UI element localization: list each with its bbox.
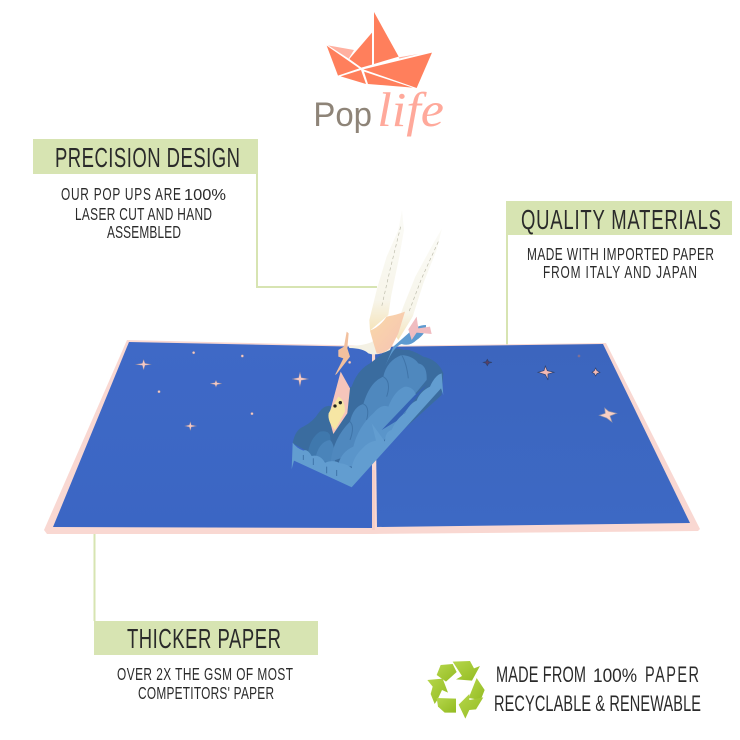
recycling statement: MADE FROM bbox=[496, 662, 586, 687]
callout: precision design: LASER CUT AND HAND bbox=[75, 205, 212, 225]
ribbon bow bbox=[335, 332, 350, 375]
small front-left arches bbox=[307, 431, 333, 465]
callout: precision design: ASSEMBLED bbox=[107, 223, 181, 243]
baby bundle bbox=[329, 372, 350, 434]
callout: precision design: 100% bbox=[184, 187, 226, 204]
card pink backing bbox=[44, 340, 700, 534]
callout: precision design bbox=[33, 139, 258, 243]
open pop-up card bbox=[44, 210, 700, 534]
top cloud under stork bbox=[385, 325, 426, 367]
callout: quality materials: FROM ITALY AND JAPAN bbox=[543, 263, 697, 283]
callout: thicker paper: THICKER PAPER bbox=[127, 624, 281, 655]
scalloped front strip bbox=[292, 373, 443, 487]
icon: recycle arrows bbox=[427, 661, 485, 719]
middle cloud wall bbox=[331, 355, 427, 462]
recycling statement: 100% bbox=[593, 666, 637, 687]
connector lines bbox=[94, 174, 507, 621]
blue inner channel bbox=[382, 385, 427, 430]
callout: thicker paper: OVER 2X THE GSM OF MOST bbox=[117, 665, 293, 685]
stork feet bbox=[408, 317, 432, 340]
cloud creases bbox=[350, 355, 408, 440]
stork pink body bbox=[370, 312, 405, 354]
logo: Poplife bbox=[313, 12, 444, 137]
callout: thicker paper: COMPETITORS' PAPER bbox=[138, 684, 274, 704]
white stork body and neck bbox=[349, 333, 397, 354]
callout: precision design: OUR POP UPS ARE bbox=[61, 185, 181, 205]
recycling statement bbox=[494, 662, 701, 716]
callout: precision design: PRECISION DESIGN bbox=[55, 143, 240, 174]
front cloud wall bbox=[338, 387, 417, 468]
strip notch details bbox=[303, 455, 337, 476]
wordmark bbox=[313, 83, 444, 137]
callout: thicker paper bbox=[94, 621, 318, 704]
left blue panel bbox=[53, 342, 372, 528]
callout: quality materials bbox=[506, 201, 732, 283]
icon: paper boat bbox=[327, 12, 432, 88]
wordmark: life bbox=[377, 83, 444, 137]
stars on left panel bbox=[135, 351, 351, 431]
right blue panel bbox=[375, 344, 690, 527]
wing feather details bbox=[382, 227, 438, 313]
callout: quality materials: QUALITY MATERIALS bbox=[521, 205, 721, 236]
center fold bbox=[372, 470, 375, 530]
back cloud wall bbox=[293, 349, 443, 477]
stork wings bbox=[369, 210, 404, 331]
stars on right panel bbox=[483, 355, 617, 422]
callout: quality materials: MADE WITH IMPORTED PAPER bbox=[527, 245, 714, 265]
wordmark: Pop bbox=[313, 96, 372, 134]
recycling statement: RECYCLABLE & RENEWABLE bbox=[494, 691, 701, 716]
pop-up stork and clouds bbox=[292, 210, 443, 487]
recycling statement: PAPER bbox=[645, 662, 699, 687]
